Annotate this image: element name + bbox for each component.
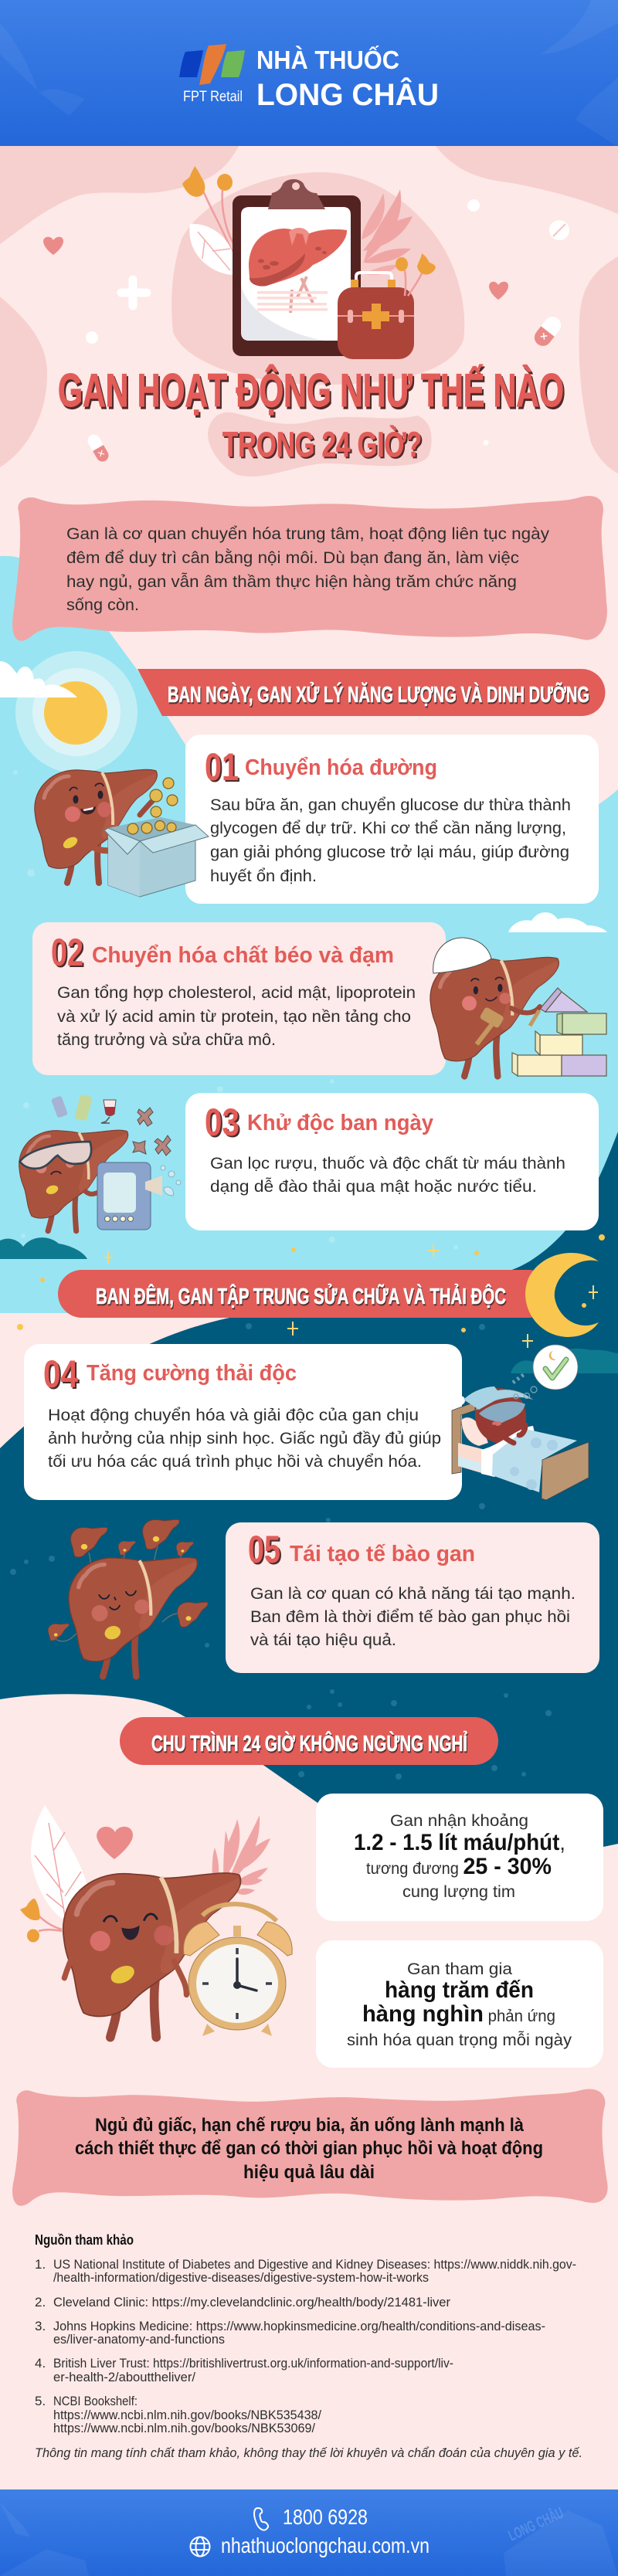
bed xyxy=(452,1402,475,1474)
text lines on paper xyxy=(257,291,328,311)
illustration: liver with glucose box xyxy=(35,769,209,897)
hammer xyxy=(477,1021,494,1044)
reference 3: 3. xyxy=(35,2319,46,2333)
reference 3: Johns Hopkins Medicine: https://www.hopkinsmedicine.org/health/conditions-and-diseas- xyxy=(53,2319,545,2333)
blanket xyxy=(481,1426,541,1477)
background: daytime sky xyxy=(0,556,618,1313)
liver with goggles xyxy=(19,1130,128,1231)
body 01: Sau bữa ăn, gan chuyển glucose dư thừa thành xyxy=(210,796,571,814)
closing message panel: Ngủ đủ giấc, hạn chế rượu bia, ăn uống lành mạnh là xyxy=(95,2115,525,2136)
box xyxy=(108,825,195,897)
illustration: liver detox machine xyxy=(19,1094,181,1231)
icon: round pill xyxy=(549,220,569,240)
card 03: dạng dễ đào thải qua mật hoặc nước tiểu. xyxy=(210,1178,537,1196)
number 01: 01 xyxy=(205,745,239,789)
card 03 xyxy=(185,1093,599,1230)
closing message panel: hiệu quả lâu dài xyxy=(243,2162,375,2183)
logo: FPT mark xyxy=(179,44,245,85)
website: nhathuoclongchau.com.vn xyxy=(221,2534,430,2557)
heading 05: Tái tạo tế bào gan xyxy=(290,1542,475,1566)
footer band xyxy=(0,2489,618,2576)
stat card: reactions: hàng nghìn phản ứng xyxy=(362,2001,555,2027)
icon: flowers left xyxy=(182,166,236,255)
icon: pink leaves xyxy=(362,189,413,275)
references xyxy=(35,2232,582,2460)
illustration: regenerating liver xyxy=(48,1519,208,1676)
icon: heart right xyxy=(489,282,508,300)
blocks xyxy=(512,988,606,1076)
intro panel: sống còn. xyxy=(66,596,139,614)
icons: white dots xyxy=(86,199,488,445)
illustration: happy liver and clock xyxy=(20,1805,292,2038)
check bubble xyxy=(533,1345,578,1390)
card 05: và tái tạo hiệu quả. xyxy=(250,1631,396,1649)
small livers xyxy=(71,1527,107,1557)
disclaimer: Thông tin mang tính chất tham khảo, không thay thế lời khuyên và chẩn đoán của chuyên gia y tế. xyxy=(35,2445,582,2460)
stat: reactions count: hàng trăm đến xyxy=(385,1977,534,2003)
card 05: Ban đêm là thời điểm tế bào gan phục hồi xyxy=(250,1608,570,1626)
stat card: blood flow: cung lượng tim xyxy=(402,1883,515,1901)
number 04: 04 xyxy=(43,1352,78,1396)
icon: capsule right xyxy=(531,314,565,349)
reference 4: British Liver Trust: https://britishlivertrust.org.uk/information-and-support/liv- xyxy=(53,2356,453,2371)
body 05: Gan là cơ quan có khả năng tái tạo mạnh. xyxy=(250,1585,576,1603)
heading 02: Chuyển hóa chất béo và đạm xyxy=(92,943,394,968)
coins xyxy=(127,778,178,834)
card 01: glycogen để dự trữ. Khi cơ thể cần năng lượng, xyxy=(210,820,566,837)
reference 5: NCBI Bookshelf: xyxy=(53,2394,138,2408)
decorative hero icons xyxy=(43,199,569,463)
illustration: sleeping liver in bed xyxy=(452,1345,589,1500)
background: hero blobs xyxy=(0,146,618,477)
icon: sun xyxy=(15,651,138,773)
icon: white leaf xyxy=(189,224,233,275)
intro text: Gan là cơ quan chuyển hóa trung tâm, hoạt động liên tục ngày xyxy=(66,525,550,543)
header band xyxy=(0,0,618,147)
icon: cloud left xyxy=(0,661,77,697)
stat card: reactions xyxy=(316,1940,603,2068)
intro panel: đêm để duy trì cân bằng nội môi. Dù bạn đang ăn, làm việc xyxy=(66,549,519,567)
watermark sign: LONG CHÂU xyxy=(505,2503,566,2545)
store watermark xyxy=(0,2503,618,2576)
liver character xyxy=(430,957,559,1076)
reference 3 xyxy=(35,2319,545,2347)
body 04: Hoạt động chuyển hóa và giải độc của gan chịu xyxy=(48,1407,419,1424)
stat: percent: tương đương 25 - 30% xyxy=(366,1854,552,1879)
helmet xyxy=(433,938,491,973)
icon: crescent moon xyxy=(525,1253,599,1337)
section banner: 24h xyxy=(120,1717,498,1765)
card 02 xyxy=(32,922,446,1075)
footboard xyxy=(542,1442,589,1500)
zzz xyxy=(514,1386,537,1399)
card 02: tăng trưởng và sửa chữa mô. xyxy=(57,1031,276,1049)
heading 04: Tăng cường thải độc xyxy=(87,1361,297,1386)
icon: white leaf xyxy=(31,1805,87,1919)
number 03: 03 xyxy=(205,1101,239,1144)
hero illustration: clipboard and first aid kit xyxy=(182,166,436,359)
bottles and wine xyxy=(51,1094,116,1123)
body 03: Gan lọc rượu, thuốc và độc chất từ máu thành xyxy=(210,1155,565,1173)
number 02: 02 xyxy=(51,931,83,974)
background: night sky xyxy=(0,1132,618,1854)
icon: liver on paper xyxy=(249,228,347,313)
icon: pink leaves xyxy=(212,1815,270,1895)
logo text: Long Châu: LONG CHÂU xyxy=(256,76,439,112)
section banner: day xyxy=(138,669,605,716)
icon: flowers xyxy=(20,1899,62,1942)
reference 1: 1. xyxy=(35,2257,46,2272)
card 01 xyxy=(185,735,599,904)
card 04: tối ưu hóa các quá trình phục hồi và chuyển hóa. xyxy=(48,1453,422,1471)
reference 1 xyxy=(35,2257,576,2285)
subtitle: TRONG 24 GIỜ? xyxy=(222,425,422,464)
closing message panel xyxy=(12,2089,608,2206)
icon: flowers right xyxy=(396,253,436,296)
illustration: liver builder with blocks xyxy=(430,938,606,1076)
reference 4: er-health-2/abouttheliver/ xyxy=(53,2370,195,2384)
reference 2: 2. xyxy=(35,2295,46,2310)
reference 4 xyxy=(35,2356,453,2384)
reference 5 xyxy=(35,2394,321,2435)
main liver xyxy=(69,1557,197,1676)
reference 5: https://www.ncbi.nlm.nih.gov/books/NBK53069/ xyxy=(53,2421,315,2435)
card 04 xyxy=(24,1344,462,1500)
icon: capsule left xyxy=(86,433,110,463)
card 02: và xử lý acid amin từ protein, tạo nền tảng cho xyxy=(57,1008,411,1026)
heading 01: Chuyển hóa đường xyxy=(245,755,437,780)
reference 4: 4. xyxy=(35,2356,46,2371)
logo text: FPT Retail: FPT Retail xyxy=(183,89,243,105)
toxins xyxy=(133,1108,171,1156)
stat card: blood flow: Gan nhận khoảng xyxy=(390,1812,528,1830)
liver character xyxy=(63,1873,241,2038)
phone number: 1800 6928 xyxy=(283,2505,368,2529)
stat card: blood flow xyxy=(316,1794,603,1921)
section banner: night xyxy=(58,1270,552,1318)
logo text: Nhà Thuốc: NHÀ THUỐC xyxy=(256,45,399,74)
liver character xyxy=(35,769,159,883)
icon: first aid kit xyxy=(338,273,414,359)
intro panel xyxy=(12,496,607,641)
clip xyxy=(268,179,325,209)
alarm clock xyxy=(184,1904,292,2036)
closing message panel: cách thiết thực để gan có thời gian phục hồi và hoạt động xyxy=(75,2138,543,2159)
stat: litres per minute: 1.2 - 1.5 lít máu/phút, xyxy=(354,1830,565,1855)
tethers xyxy=(56,1543,189,1641)
sleeping liver xyxy=(470,1383,531,1448)
machine xyxy=(97,1162,151,1230)
icon: globe xyxy=(190,2537,210,2557)
icon: cloud right xyxy=(508,912,607,932)
background: closing pink panel xyxy=(0,1694,618,2576)
body 02: Gan tổng hợp cholesterol, acid mật, lipoprotein xyxy=(57,984,416,1002)
card 04: ảnh hưởng của nhịp sinh học. Giấc ngủ đầy đủ giúp xyxy=(48,1430,441,1448)
reference 5: https://www.ncbi.nlm.nih.gov/books/NBK535438/ xyxy=(53,2408,321,2422)
stat card: reactions: Gan tham gia xyxy=(407,1960,512,1978)
icon: phone xyxy=(254,2508,268,2530)
reference 1: US National Institute of Diabetes and Digestive and Kidney Diseases: https://www.niddk.nih.gov- xyxy=(53,2257,576,2272)
card 01: huyết ổn định. xyxy=(210,867,317,885)
icon: teal cloud right xyxy=(511,1349,618,1373)
icon: teal cloud left xyxy=(0,1237,87,1259)
icon: plus xyxy=(121,280,147,306)
references heading: Nguồn tham khảo xyxy=(35,2232,134,2248)
icon: heart left xyxy=(43,237,63,255)
reference 1: /health-information/digestive-diseases/digestive-system-how-it-works xyxy=(53,2270,429,2285)
card 01: gan giải phóng glucose trở lại máu, giúp đường xyxy=(210,843,569,861)
icon: heart xyxy=(97,1827,133,1859)
clipboard board xyxy=(233,195,361,356)
stars on sky xyxy=(17,1234,605,1348)
number 05: 05 xyxy=(248,1528,280,1571)
intro panel: hay ngủ, gan vẫn âm thầm thực hiện hàng trăm chức năng xyxy=(66,573,517,591)
stat card: reactions: sinh hóa quan trọng mỗi ngày xyxy=(347,2031,572,2049)
paper xyxy=(241,207,351,341)
reference 5: 5. xyxy=(35,2394,46,2408)
section banner: 24h: CHU TRÌNH 24 GIỜ KHÔNG NGỪNG NGHỈ xyxy=(151,1730,467,1756)
reference 3: es/liver-anatomy-and-functions xyxy=(53,2332,225,2347)
heading 03: Khử độc ban ngày xyxy=(247,1111,433,1135)
reference 2: Cleveland Clinic: https://my.clevelandclinic.org/health/body/21481-liver xyxy=(53,2295,450,2310)
card 05 xyxy=(226,1522,599,1673)
